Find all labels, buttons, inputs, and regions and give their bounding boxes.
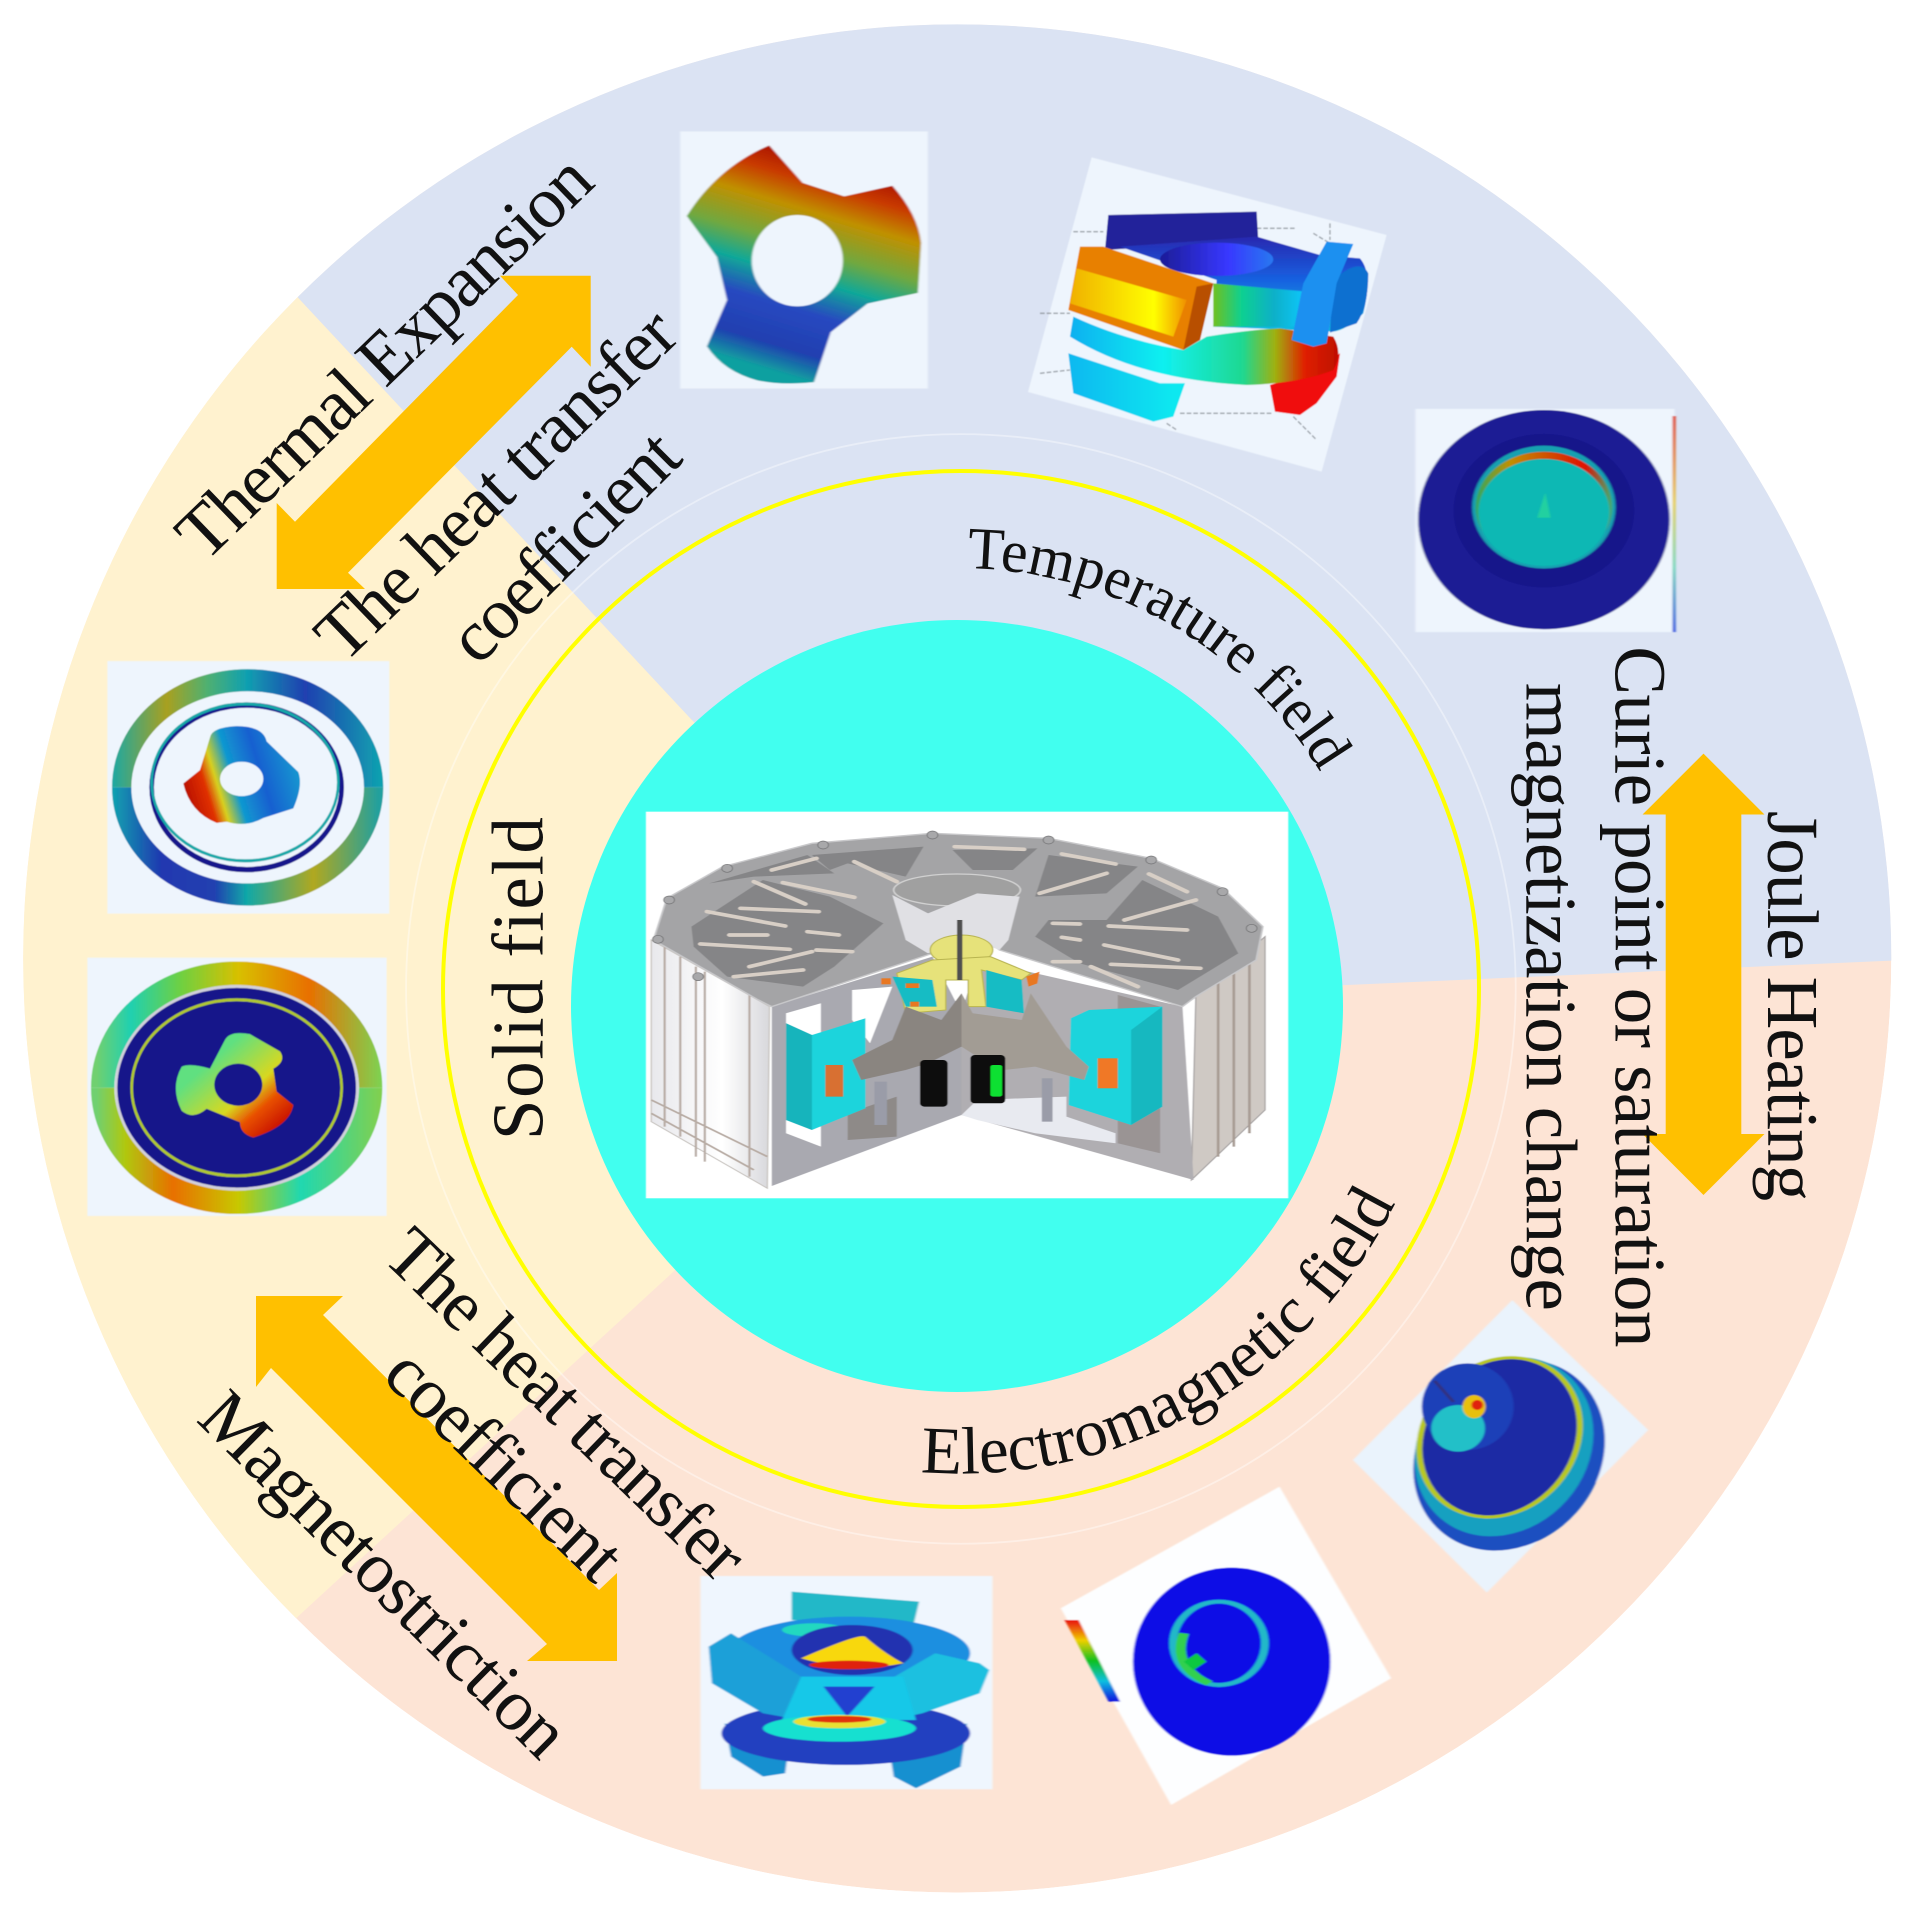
ring xyxy=(1476,452,1612,562)
lower band xyxy=(1070,317,1338,385)
mid dome xyxy=(1405,1353,1594,1521)
colour bar xyxy=(1672,416,1676,632)
yellow field ring xyxy=(443,471,1479,1507)
navy disc xyxy=(116,986,357,1189)
panel: thermal cross-section xyxy=(680,131,928,389)
right outer wall xyxy=(1191,937,1265,1180)
panel: top disc temperature xyxy=(1415,409,1676,632)
green ring xyxy=(1173,1602,1265,1685)
label: heat transfer upper: The heat transfer xyxy=(299,292,693,676)
sector: temperature field xyxy=(298,24,1892,986)
left cyan yoke xyxy=(786,1018,866,1130)
blue disc xyxy=(1133,1568,1331,1756)
orange pads xyxy=(881,972,1040,1027)
hub shaft xyxy=(892,893,1020,953)
central gray T bracket xyxy=(852,993,1089,1080)
orange frame xyxy=(1068,247,1213,350)
red block xyxy=(1270,353,1340,415)
teal glow xyxy=(1472,446,1616,569)
yellow hot band xyxy=(801,1636,903,1667)
outer dome xyxy=(1396,1354,1622,1556)
arrow: joule heating and curie point xyxy=(1643,754,1764,1195)
thin ring xyxy=(132,1000,342,1176)
left outer wall xyxy=(651,940,770,1188)
plate cells xyxy=(691,847,1238,990)
plate slots xyxy=(700,847,1200,987)
image background xyxy=(646,812,1288,1198)
feet xyxy=(725,1723,788,1777)
field and coupling labels xyxy=(160,138,1833,1773)
arrow: thermal expansion and heat transfer xyxy=(277,276,591,589)
right disc xyxy=(1330,266,1368,333)
centre cyan blocks xyxy=(892,970,1024,1013)
front band xyxy=(1213,283,1307,327)
outer ring upper half xyxy=(103,975,371,1088)
colour bar xyxy=(1065,1620,1120,1702)
label: electromagnetic field: Electromagnetic field xyxy=(922,1185,1395,1474)
lower ring xyxy=(721,1702,970,1765)
label: coefficient lower: coefficient xyxy=(369,1331,641,1597)
label: temperature field: Temperature field xyxy=(970,528,1353,772)
bore xyxy=(1160,243,1273,276)
arrow: heat transfer and magnetostriction xyxy=(256,1296,617,1661)
label: solid field: Solid field xyxy=(478,817,559,1140)
navy disc xyxy=(1418,410,1670,629)
openings xyxy=(786,1003,821,1147)
centre hub disc xyxy=(894,874,1020,906)
teal centre xyxy=(1478,459,1610,566)
upper body xyxy=(1120,237,1368,332)
centre column xyxy=(782,1677,916,1720)
right wall stripes xyxy=(1218,953,1249,1157)
top cap xyxy=(1422,1363,1514,1450)
label: joule heating: Joule Heating xyxy=(1752,811,1833,1201)
panel: electromagnetic 3D model xyxy=(700,1576,993,1789)
plate bolts xyxy=(653,831,1257,981)
cap patches xyxy=(1431,1405,1485,1452)
label: magnetostriction: Magnetostriction xyxy=(184,1374,586,1773)
panel: blue magnetic disc xyxy=(1061,1487,1391,1805)
panel: domed magnetic model xyxy=(1353,1300,1648,1593)
fins xyxy=(1105,212,1258,250)
spindle xyxy=(1433,1380,1455,1402)
left wing xyxy=(709,1633,801,1720)
inner ring xyxy=(152,705,342,870)
block side xyxy=(1183,283,1213,350)
grid lines xyxy=(1040,223,1330,440)
main body xyxy=(728,1617,970,1690)
inner shade xyxy=(1454,434,1634,587)
right cyan yoke xyxy=(1069,1007,1162,1125)
bright spots xyxy=(782,1623,846,1637)
sector: solid field xyxy=(23,298,694,1618)
outer ring lower half xyxy=(103,1088,371,1201)
green patch xyxy=(1184,1653,1206,1670)
label: coefficient upper: coefficient xyxy=(432,414,696,678)
panel: ring deformation xyxy=(107,661,389,914)
outer ring lower half xyxy=(122,787,374,894)
centre cyan disc xyxy=(571,620,1343,1392)
central device image: cutaway machine xyxy=(646,812,1288,1198)
outer ring upper half xyxy=(122,680,374,787)
left wall stripes xyxy=(651,947,767,1177)
three-lobed rotor xyxy=(183,726,300,824)
right tab xyxy=(1292,242,1353,347)
panel: disc deformation xyxy=(87,958,387,1216)
pin xyxy=(1537,493,1551,518)
panel: 3D temperature model xyxy=(1028,157,1387,472)
rainbow three-lobed plate xyxy=(687,145,921,384)
teal rim xyxy=(1399,1352,1610,1541)
right inner cut face xyxy=(961,960,1194,1180)
right wing xyxy=(871,1653,989,1723)
yellow face xyxy=(1070,268,1187,337)
label: heat transfer lower: The heat transfer xyxy=(369,1212,763,1596)
black coil right with green bar xyxy=(970,1055,1005,1103)
three-lobed rotor xyxy=(176,1033,293,1138)
lower left block xyxy=(1068,353,1185,422)
bore xyxy=(792,1625,913,1675)
label: thermal expansion: Thermal Expansion xyxy=(160,138,608,575)
sector: electromagnetic field xyxy=(296,297,1892,1892)
hub hole xyxy=(214,1064,262,1106)
top plate xyxy=(653,833,1263,1007)
central spindle xyxy=(957,920,962,980)
lower struts xyxy=(874,1078,1053,1125)
lower hot band xyxy=(763,1715,916,1742)
label: magnetization change: magnetization change xyxy=(1511,683,1592,1311)
yellow centre assembly xyxy=(897,935,1031,1013)
red hot band xyxy=(809,1661,889,1669)
left inner cut face xyxy=(772,957,961,1186)
top tab xyxy=(792,1592,919,1628)
label: curie point: Curie point or saturation xyxy=(1600,646,1681,1347)
black coil left xyxy=(920,1060,948,1107)
